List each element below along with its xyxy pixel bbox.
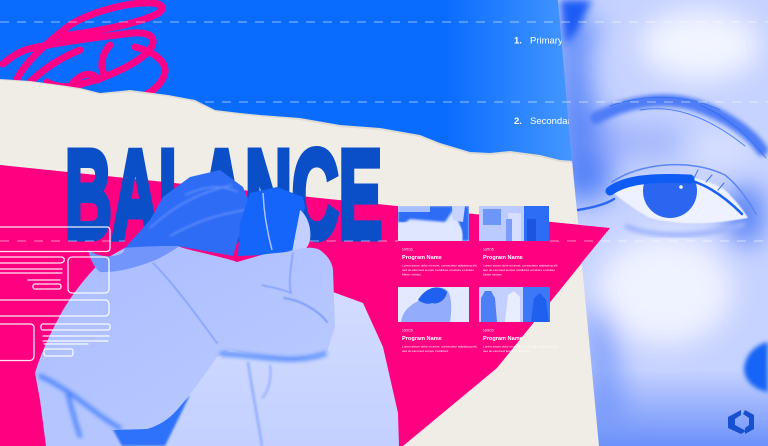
hood xyxy=(292,210,310,253)
menu item: primary: 1. xyxy=(514,36,522,46)
face photo xyxy=(550,0,768,446)
wireframe sketch xyxy=(0,227,110,360)
card: program 2: 10/2/15 xyxy=(483,248,494,252)
program cards xyxy=(398,206,558,353)
card: program 1: sed do eiusmod tempor incididunt ut labore et dolore xyxy=(402,268,474,272)
card: program 2: Minim veniam. xyxy=(483,272,503,276)
menu item: secondary: Secondary xyxy=(530,116,576,127)
photo 3 xyxy=(398,287,469,322)
card: program 3: 10/2/15 xyxy=(402,328,413,332)
jacket seams xyxy=(153,253,327,343)
card: program 1 xyxy=(398,206,477,276)
card: program 1: Program Name xyxy=(402,255,442,261)
card: program 1: Minim veniam. xyxy=(402,272,422,276)
card: program 2: Program Name xyxy=(483,255,523,261)
card: program 4: sed do eiusmod tempor incididunt xyxy=(483,349,529,353)
card: program 3: Lorem ipsum dolor sit amet, consectetur adipiscing elit, xyxy=(402,344,477,348)
card: program 4 xyxy=(479,287,558,353)
collar xyxy=(88,246,180,272)
eyelid and lashes xyxy=(578,165,756,214)
card: program 1: 10/2/15 xyxy=(402,248,413,252)
card: program 3: Program Name xyxy=(402,336,442,342)
menu item: primary: Primary xyxy=(530,36,563,46)
card: program 4: Program Name xyxy=(483,336,523,342)
pink scribble xyxy=(3,3,165,98)
torn paper xyxy=(0,79,605,446)
card: program 2: sed do eiusmod tempor incididunt ut labore et dolore xyxy=(483,268,555,272)
card: program 4: Lorem ipsum dolor sit amet, consectetur adipiscing elit, xyxy=(483,344,558,348)
photo 4 xyxy=(479,287,550,322)
front person lower sleeve xyxy=(35,370,135,446)
card: program 2: Lorem ipsum dolor sit amet, consectetur adipiscing elit, xyxy=(483,264,558,268)
pink triangle tip over face xyxy=(570,224,610,277)
menu items xyxy=(514,36,576,127)
photo 2 xyxy=(479,206,549,241)
nose shadow xyxy=(744,342,768,392)
title: BALANCE xyxy=(65,124,382,265)
menu item: secondary: 2. xyxy=(514,116,522,127)
card: program 2 xyxy=(479,206,558,276)
jacket underside shadow xyxy=(112,395,190,446)
skin light and shadow areas xyxy=(560,10,763,425)
pink background shape xyxy=(0,165,610,446)
card: program 3 xyxy=(398,287,477,353)
chin shade xyxy=(593,377,768,446)
iris xyxy=(643,180,697,218)
back jacket zipper folds xyxy=(248,362,271,446)
back person hair xyxy=(238,187,305,256)
people xyxy=(35,170,399,446)
front person jacket xyxy=(35,246,335,430)
card: program 3: sed do eiusmod tempor incididunt xyxy=(402,349,448,353)
lower lid shading xyxy=(625,224,745,235)
card: program 1: Lorem ipsum dolor sit amet, consectetur adipiscing elit, xyxy=(402,264,477,268)
eyebrow xyxy=(596,97,766,158)
photo 1 xyxy=(398,206,469,241)
dark corner at top xyxy=(560,0,592,45)
front person hair xyxy=(125,170,252,256)
back person jacket xyxy=(100,290,399,446)
eye white xyxy=(612,176,748,223)
logo xyxy=(728,410,754,434)
jacket shadows xyxy=(40,354,325,436)
dashed guide lines xyxy=(0,22,768,241)
card: program 4: 10/2/15 xyxy=(483,328,494,332)
